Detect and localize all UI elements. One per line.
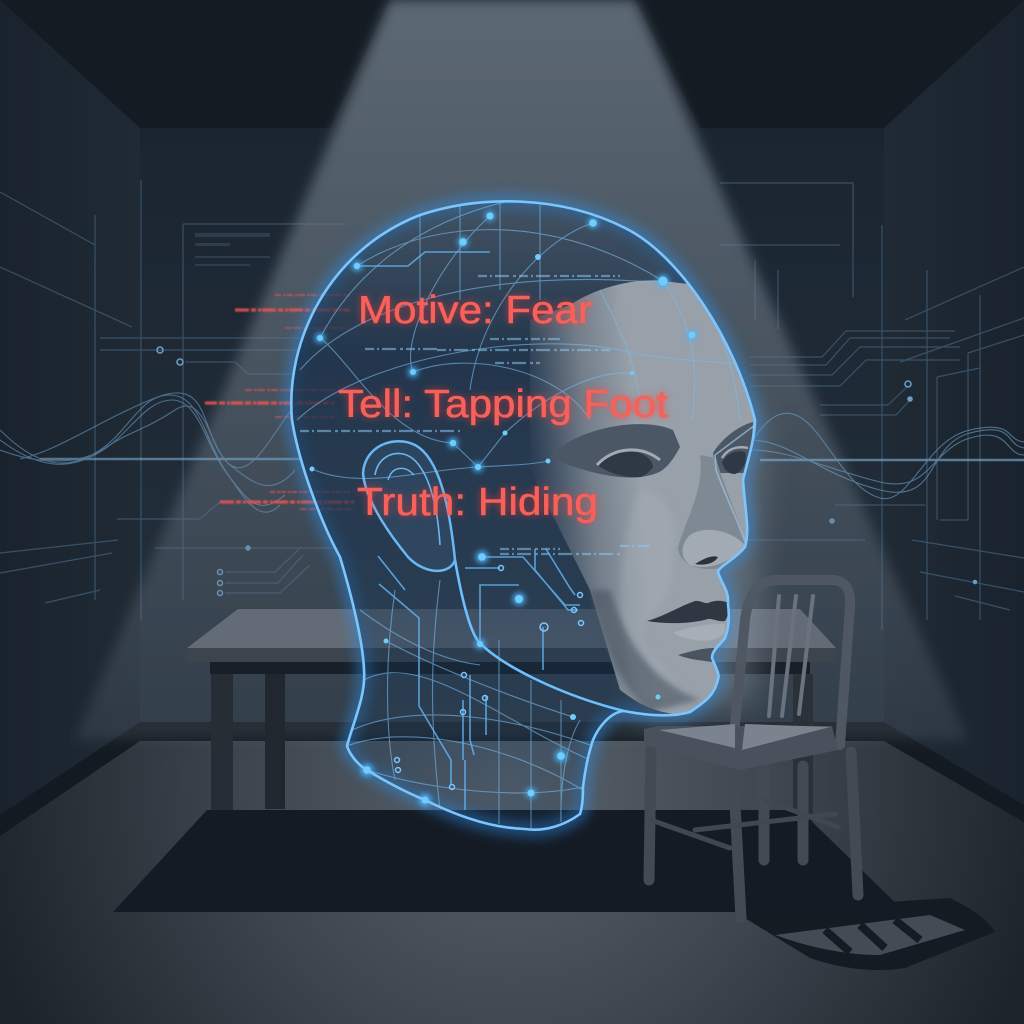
red text glow [338,289,668,524]
sound waves right [750,413,1024,499]
holographic head [291,200,760,830]
mouth [647,601,729,623]
red text glow: Motive: Fear [358,289,592,332]
circuit pads [394,566,584,790]
node glow [315,211,697,806]
label: Motive: Fear: Motive: Fear [358,289,592,332]
circuit traces in head [357,252,580,810]
ear [363,441,455,571]
face mask [530,280,760,714]
head outline [291,201,755,830]
wireframe mesh [297,200,745,829]
network nodes [310,212,696,804]
chair [644,580,858,918]
chair seat [644,726,838,770]
rug [113,810,905,912]
chair back rail [733,580,850,745]
trace nodes on walls [157,347,976,596]
label: Truth: Hiding: Truth: Hiding [357,481,598,524]
circuit traces on walls [0,180,1024,630]
head glow [291,201,755,830]
red data streaks [205,295,355,509]
table [187,609,836,895]
chair stretchers [651,800,838,848]
eyes [597,452,653,477]
sound waves left [0,393,300,512]
forehead plate [686,284,687,285]
wall document bars [195,233,270,266]
red text glow: Tell: Tapping Foot [338,383,668,426]
chair legs [649,750,858,918]
chair slats [769,596,813,716]
chair shadow [735,898,995,970]
cheek and jaw shade [590,590,700,712]
face haze [640,260,760,720]
red text glow: Truth: Hiding [357,481,598,524]
cheek highlight [621,514,650,662]
data dashes in head [300,276,650,554]
label: Tell: Tapping Foot: Tell: Tapping Foot [338,383,668,426]
nose ridge line [715,425,755,545]
nose [678,455,747,569]
jaw line [455,560,624,711]
eye sockets [550,424,680,478]
spotlight beam [75,0,968,740]
